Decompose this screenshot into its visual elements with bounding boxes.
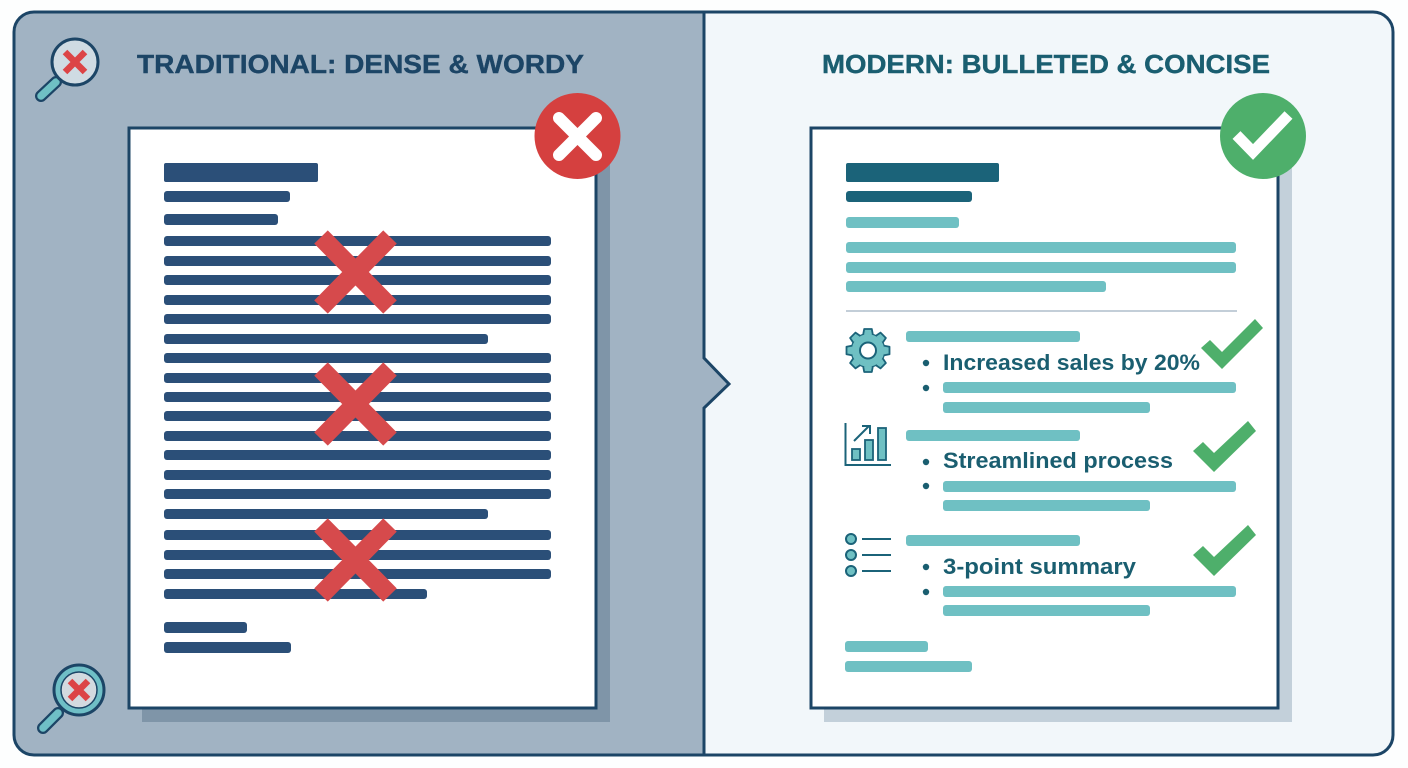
section: summary (906, 535, 1236, 616)
panel: traditional background (14, 12, 729, 755)
center divider arrow (704, 12, 729, 755)
heading: modern: MODERN: BULLETED & CONCISE (822, 49, 1270, 79)
section: sales (906, 331, 1236, 413)
icon: magnifier with x, bottom (43, 665, 104, 728)
section: summary: 3-point summary (943, 554, 1137, 579)
icon: list (846, 534, 891, 576)
red crosses (321, 237, 390, 595)
icon: red x badge (534, 93, 620, 179)
heading: traditional: TRADITIONAL: DENSE & WORDY (137, 49, 584, 79)
section: process (906, 430, 1236, 511)
dense text lines (164, 163, 551, 653)
icon: magnifier with x, top (41, 39, 98, 96)
header lines (846, 163, 1237, 312)
panel: modern document (811, 128, 1292, 722)
icon: check marks (1193, 319, 1263, 576)
section: sales: Increased sales by 20% (943, 350, 1200, 375)
panel: traditional document (129, 128, 610, 722)
closing lines (845, 641, 972, 672)
icon: green check badge (1220, 93, 1306, 179)
icon: bar chart (846, 423, 891, 465)
icon: gear (846, 329, 890, 372)
section: process: Streamlined process (943, 448, 1173, 473)
